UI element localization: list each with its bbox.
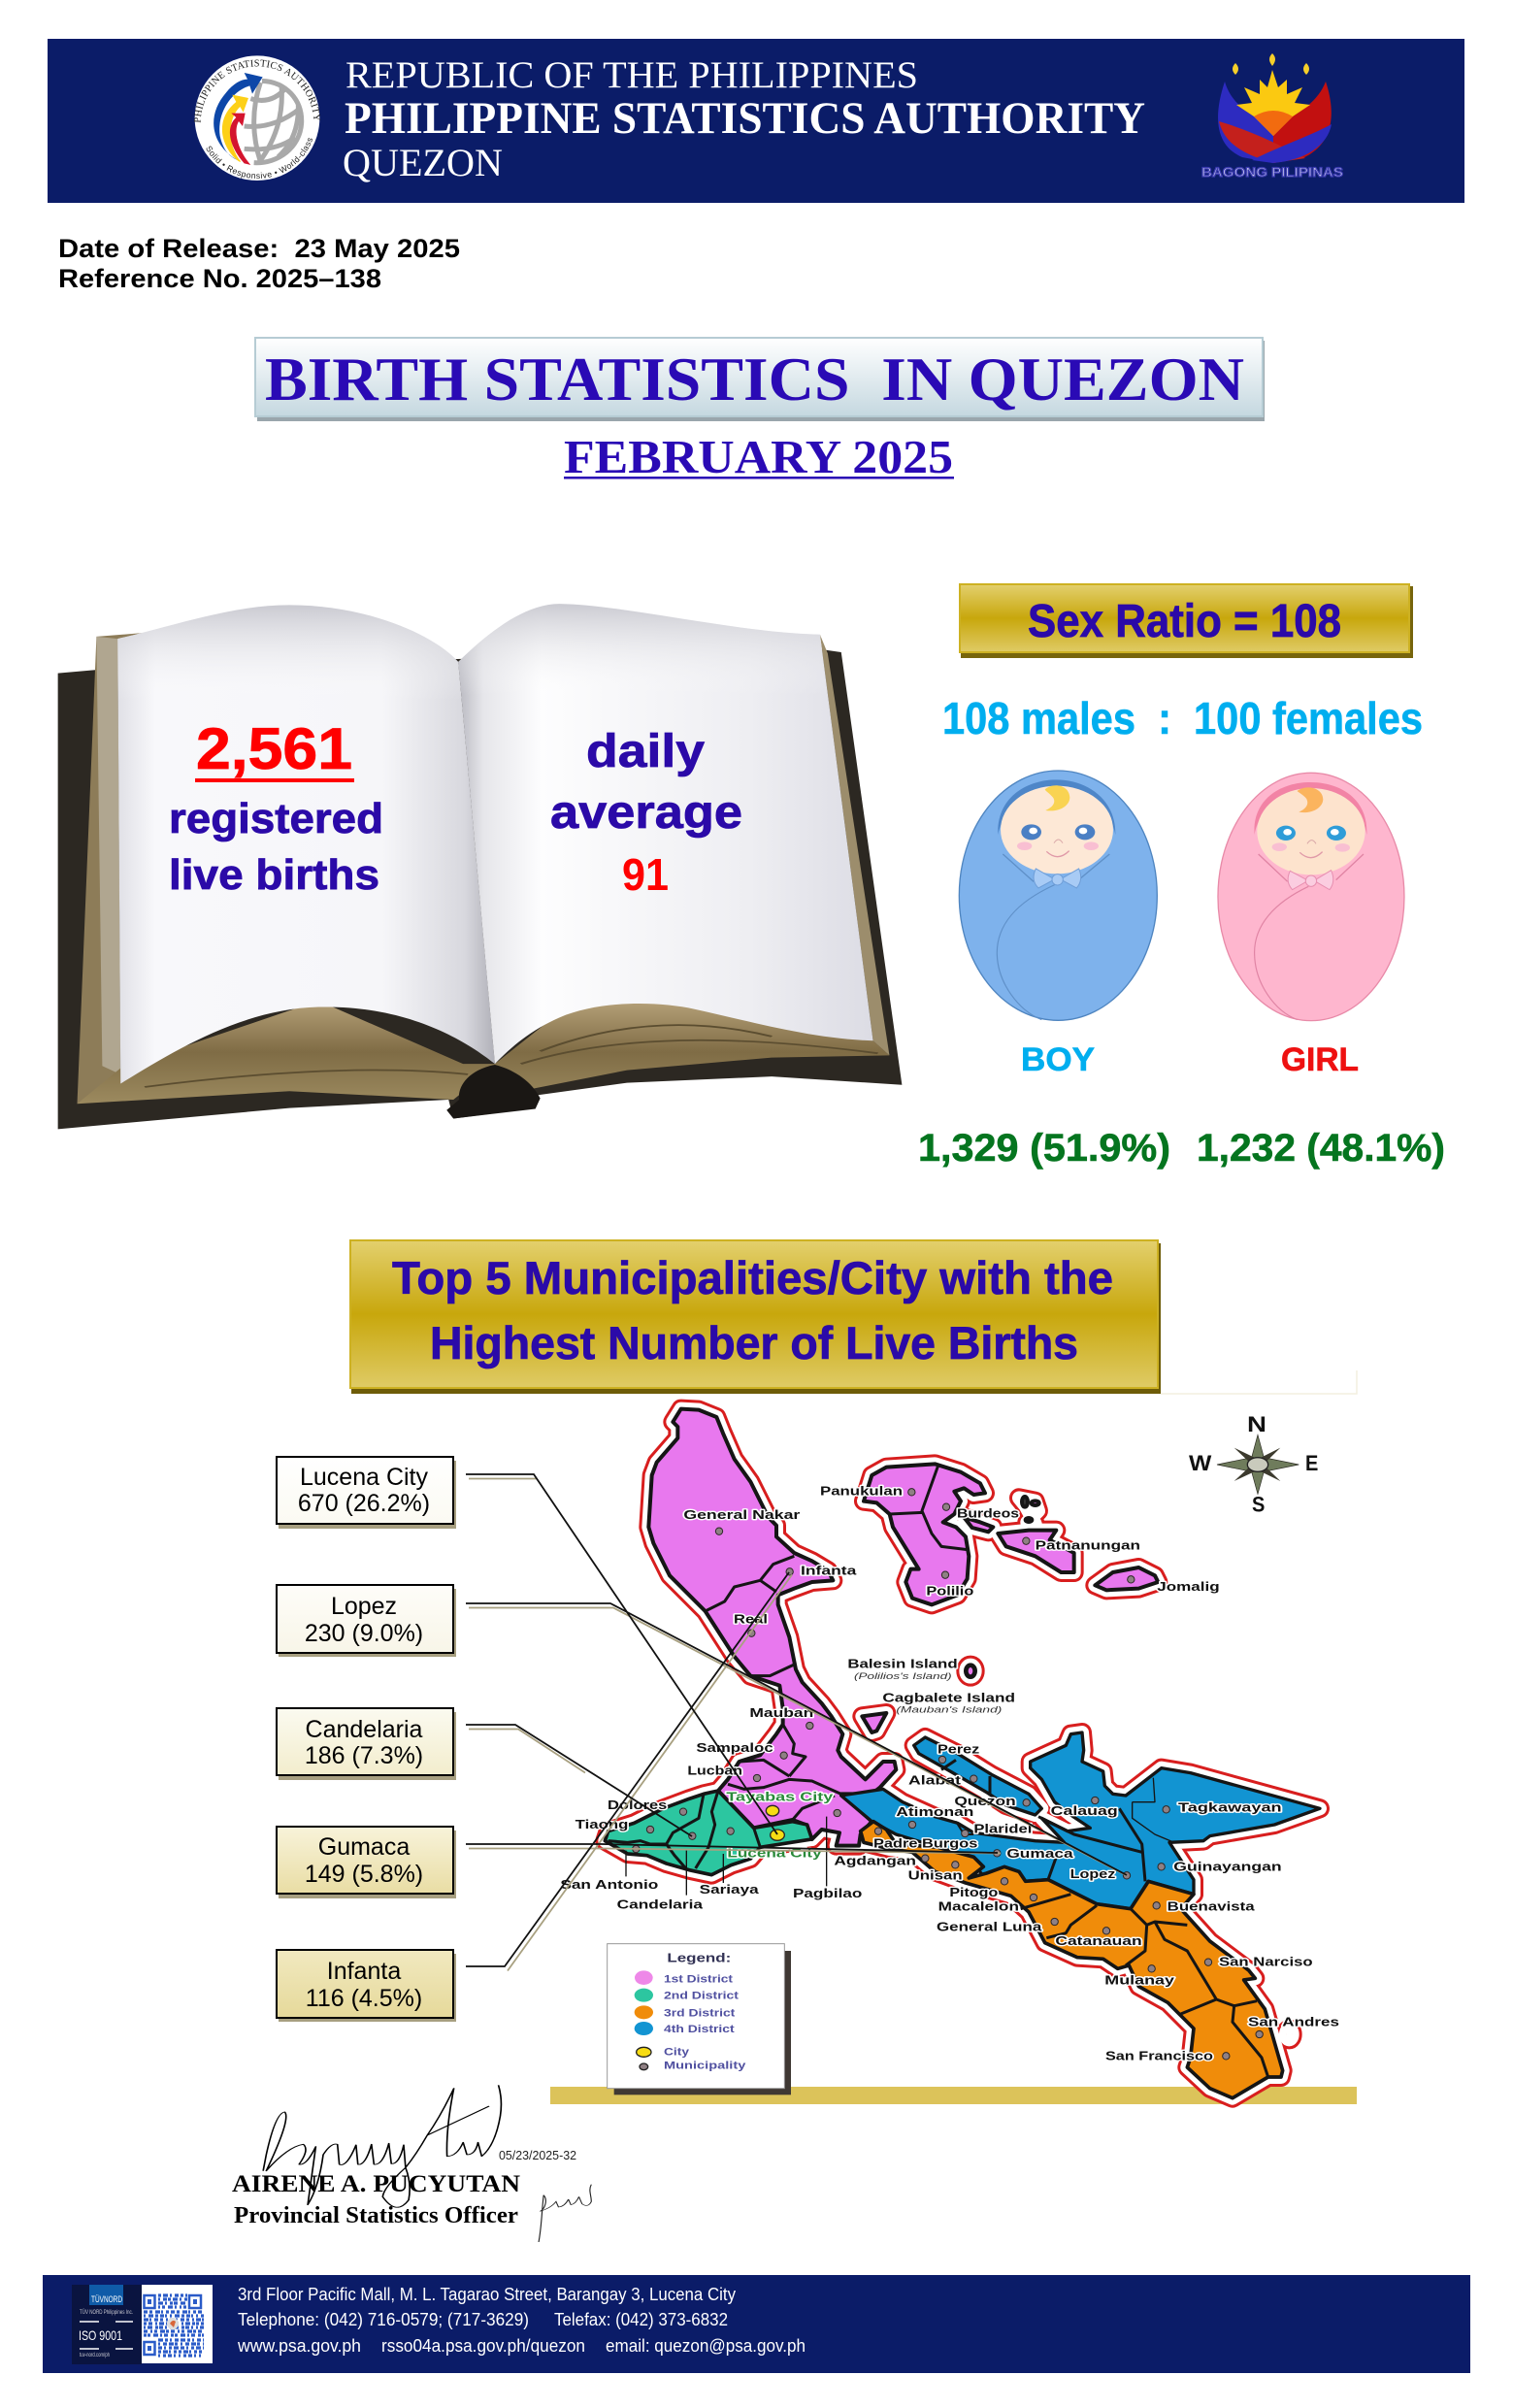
labels: municipalities: Patnanungan bbox=[1036, 1538, 1140, 1553]
region: 4th district Alabat island bbox=[914, 1737, 1041, 1815]
labels: municipalities: Jomalig bbox=[1157, 1579, 1220, 1594]
callout: Candelaria: 186 (7.3%) bbox=[305, 1742, 423, 1769]
icon: Bagong Pilipinas logo bbox=[1201, 53, 1343, 180]
labels: municipalities: Pitogo bbox=[949, 1885, 998, 1899]
callout: Lucena City: Lucena City bbox=[300, 1464, 429, 1491]
icon: QR code bbox=[142, 2285, 213, 2363]
leader line: Gumaca bbox=[466, 1844, 998, 1853]
icon: compass: E bbox=[1305, 1451, 1318, 1475]
stat: daily average bbox=[550, 726, 742, 900]
legend: 4th District bbox=[664, 2024, 735, 2035]
region: 1st district islands bbox=[862, 1464, 1158, 1732]
badge: ISO 9001 certification bbox=[72, 2285, 142, 2364]
text: officer name: AIRENE A. PUCYUTAN bbox=[232, 2171, 520, 2197]
region: 3rd district bbox=[861, 1822, 1283, 2098]
text: address: 3rd Floor Pacific Mall, M. L. Tagarao Street, Barangay 3, Lucena City bbox=[238, 2285, 736, 2304]
callout: Gumaca: Gumaca bbox=[318, 1833, 410, 1861]
labels: municipalities: Unisan bbox=[908, 1868, 963, 1883]
labels: municipalities: Candelaria bbox=[617, 1897, 704, 1912]
icon: compass: S bbox=[1252, 1492, 1265, 1516]
labels: municipalities: Tiaong bbox=[576, 1817, 628, 1831]
labels: municipalities: Tagkawayan bbox=[1178, 1800, 1282, 1815]
callout: Lopez: 230 (9.0%) bbox=[305, 1620, 423, 1647]
stat: total registered live births: 2,561 bbox=[196, 716, 352, 781]
labels: municipalities: Cagbalete Island bbox=[882, 1690, 1015, 1704]
panel: map of Quezon bbox=[550, 1409, 1357, 2104]
labels: municipalities: Panukulan bbox=[820, 1484, 903, 1499]
heading: republic line: REPUBLIC OF THE PHILIPPINES bbox=[345, 54, 918, 96]
labels: municipalities: Macalelon bbox=[938, 1898, 1019, 1913]
stat: daily average: 91 bbox=[622, 849, 669, 900]
panel: open book bbox=[58, 604, 902, 1129]
stat: boys count: 1,329 (51.9%) bbox=[918, 1127, 1170, 1170]
icon: baby boy bbox=[959, 771, 1157, 1020]
ground bar under map bbox=[550, 2087, 1357, 2104]
heading: agency name: PHILIPPINE STATISTICS AUTHORITY bbox=[345, 93, 1145, 144]
icon: baby girl bbox=[1218, 773, 1404, 1021]
callout: Lucena City: 670 (26.2%) bbox=[298, 1490, 430, 1517]
header banner bbox=[48, 39, 1464, 203]
icon: book illustration bbox=[58, 604, 902, 1129]
legend: 1st District bbox=[664, 1974, 734, 1986]
labels: municipalities: Alabat bbox=[908, 1772, 962, 1787]
labels: municipalities: San Andres bbox=[1248, 2014, 1339, 2029]
callout: Candelaria: Candelaria bbox=[306, 1716, 423, 1743]
callout: Lopez: Lopez bbox=[331, 1593, 397, 1620]
leader line: Lopez bbox=[466, 1603, 1127, 1875]
panel: sex ratio bbox=[918, 584, 1445, 1170]
labels: municipalities: Quezon bbox=[954, 1794, 1016, 1808]
labels: municipalities: San Antonio bbox=[560, 1877, 658, 1892]
text block: release date and reference: Date of Release: 23 May 2025 bbox=[58, 234, 460, 263]
labels: municipalities bbox=[560, 1484, 1339, 2063]
region: 4th district peninsula bbox=[841, 1732, 1320, 1909]
labels: municipalities: Lucena City bbox=[727, 1845, 823, 1860]
labels: municipalities: San Francisco bbox=[1105, 2049, 1213, 2063]
labels: municipalities: Lopez bbox=[1070, 1866, 1116, 1881]
subtitle: month: FEBRUARY 2025 bbox=[564, 430, 953, 483]
signature scribble bbox=[263, 2085, 501, 2207]
initials scribble bbox=[539, 2185, 591, 2242]
label ticks bbox=[626, 1817, 827, 1896]
text block: release date and reference: Reference No. 2025–138 bbox=[58, 264, 381, 293]
footer banner bbox=[43, 2275, 1470, 2373]
markers: cities bbox=[766, 1805, 784, 1840]
labels: municipalities: Burdeos bbox=[957, 1505, 1019, 1520]
badge: ISO 9001 certification: tuv-nord.com/ph bbox=[80, 2353, 110, 2359]
legend bbox=[608, 1944, 791, 2095]
labels: municipalities: (Polilios's Island) bbox=[854, 1671, 952, 1681]
heading: top 5 box: Highest Number of Live Births bbox=[430, 1317, 1078, 1369]
callout: Infanta: 116 (4.5%) bbox=[306, 1985, 422, 2012]
stat: girls count: 1,232 (48.1%) bbox=[1197, 1127, 1445, 1170]
callout: Lopez bbox=[277, 1585, 456, 1657]
stat: total registered live births: registered bbox=[169, 795, 383, 842]
heading: top 5 box: Top 5 Municipalities/City with the bbox=[392, 1252, 1113, 1303]
icon: compass bbox=[1189, 1412, 1318, 1516]
region: 2nd district bbox=[605, 1791, 812, 1875]
heading: sex ratio box bbox=[960, 584, 1413, 658]
labels: municipalities: Buenavista bbox=[1168, 1898, 1256, 1913]
text: telephone: Telephone: (042) 716-0579; (717-3629) bbox=[238, 2310, 529, 2329]
leader lines: shadows bbox=[469, 1479, 1127, 1970]
icon: PSA seal: PHILIPPINE STATISTICS AUTHORITY bbox=[194, 60, 320, 122]
labels: municipalities: San Narciso bbox=[1219, 1955, 1313, 1969]
labels: municipalities: Dolores bbox=[608, 1798, 667, 1812]
heading: province: QUEZON bbox=[343, 141, 503, 184]
legend: Municipality bbox=[664, 2061, 745, 2072]
badge: ISO 9001 certification: ISO 9001 bbox=[79, 2327, 122, 2343]
callout: Gumaca: 149 (5.8%) bbox=[305, 1861, 423, 1888]
labels: municipalities: Plaridel bbox=[973, 1821, 1032, 1835]
label: girl: GIRL bbox=[1281, 1041, 1359, 1078]
labels: municipalities: Mauban bbox=[749, 1705, 813, 1720]
callout: Gumaca bbox=[277, 1827, 456, 1898]
callout: Lucena City bbox=[277, 1457, 456, 1529]
callout: Infanta bbox=[277, 1950, 456, 2022]
icon: compass: N bbox=[1247, 1412, 1266, 1436]
icon: Bagong Pilipinas logo: BAGONG PILIPINAS bbox=[1201, 164, 1343, 180]
labels: municipalities: Catanauan bbox=[1055, 1933, 1142, 1948]
labels: municipalities: Atimonan bbox=[896, 1804, 973, 1819]
labels: municipalities: Balesin Island bbox=[847, 1656, 958, 1670]
text: officer title: Provincial Statistics Officer bbox=[234, 2203, 518, 2228]
labels: municipalities: (Mauban's Island) bbox=[896, 1704, 1002, 1714]
labels: municipalities: Real bbox=[734, 1612, 768, 1627]
region: 1st district mainland bbox=[648, 1409, 896, 1846]
labels: municipalities: Infanta bbox=[801, 1564, 857, 1578]
labels: municipalities: Sariaya bbox=[700, 1882, 760, 1897]
badge: ISO 9001 certification: TÜV NORD Philippines Inc. bbox=[80, 2309, 133, 2316]
chart: district map bbox=[560, 1409, 1339, 2098]
labels: municipalities: General Nakar bbox=[683, 1507, 800, 1522]
heading: top 5 box bbox=[350, 1240, 1161, 1394]
labels: municipalities: Gumaca bbox=[1006, 1846, 1074, 1861]
markers: municipalities bbox=[633, 1489, 1263, 2060]
labels: municipalities: Calauag bbox=[1051, 1803, 1118, 1818]
labels: municipalities: Pagbilao bbox=[793, 1886, 862, 1900]
labels: municipalities: General Luna bbox=[937, 1919, 1042, 1933]
stat: daily average: daily bbox=[586, 726, 705, 777]
labels: municipalities: Mulanay bbox=[1104, 1972, 1175, 1987]
stat: daily average: average bbox=[550, 787, 742, 839]
label: boy: BOY bbox=[1021, 1041, 1095, 1078]
legend: City bbox=[664, 2047, 689, 2059]
labels: municipalities: Tayabas City bbox=[726, 1790, 834, 1804]
labels: municipalities: Polilio bbox=[926, 1583, 973, 1598]
labels: municipalities: Guinayangan bbox=[1173, 1859, 1282, 1873]
icon: PSA seal: Solid • Responsive • World-class bbox=[206, 138, 312, 179]
labels: municipalities: Agdangan bbox=[834, 1854, 916, 1868]
heading: sex ratio box: Sex Ratio = 108 bbox=[1028, 596, 1341, 647]
stat: total registered live births: live births bbox=[169, 851, 379, 899]
leader line: Candelaria bbox=[466, 1725, 692, 1836]
legend: 3rd District bbox=[664, 2007, 736, 2019]
text: telefax: Telefax: (042) 373-6832 bbox=[554, 2310, 728, 2329]
stat: total registered live births bbox=[169, 716, 383, 899]
labels: municipalities: Perez bbox=[937, 1742, 980, 1757]
labels: municipalities: Sampaloc bbox=[696, 1740, 773, 1755]
labels: municipalities: Padre Burgos bbox=[873, 1835, 977, 1850]
text: website: www.psa.gov.ph bbox=[237, 2336, 361, 2356]
text block: release date and reference bbox=[58, 234, 460, 293]
leader line: Lucena City bbox=[466, 1474, 777, 1834]
callout: Candelaria bbox=[277, 1708, 456, 1780]
icon: PSA seal bbox=[194, 55, 320, 181]
icon: compass: W bbox=[1189, 1451, 1212, 1475]
signature block bbox=[232, 2085, 591, 2242]
callout: Infanta: Infanta bbox=[327, 1958, 401, 1985]
legend: Legend: bbox=[667, 1952, 731, 1965]
title box: BIRTH STATISTICS IN QUEZON bbox=[265, 345, 1244, 413]
badge: ISO 9001 certification: TÜVNORD bbox=[91, 2294, 122, 2304]
text: date stamp: 05/23/2025-32 bbox=[499, 2148, 576, 2162]
leader line: Infanta bbox=[466, 1572, 789, 1966]
text: email: email: quezon@psa.gov.ph bbox=[606, 2336, 806, 2356]
text: ratio males to females: 108 males : 100 females bbox=[942, 693, 1423, 743]
labels: municipalities: Lucban bbox=[687, 1763, 742, 1777]
legend: 2nd District bbox=[664, 1990, 740, 2001]
text: regional website: rsso04a.psa.gov.ph/quezon bbox=[381, 2336, 585, 2356]
